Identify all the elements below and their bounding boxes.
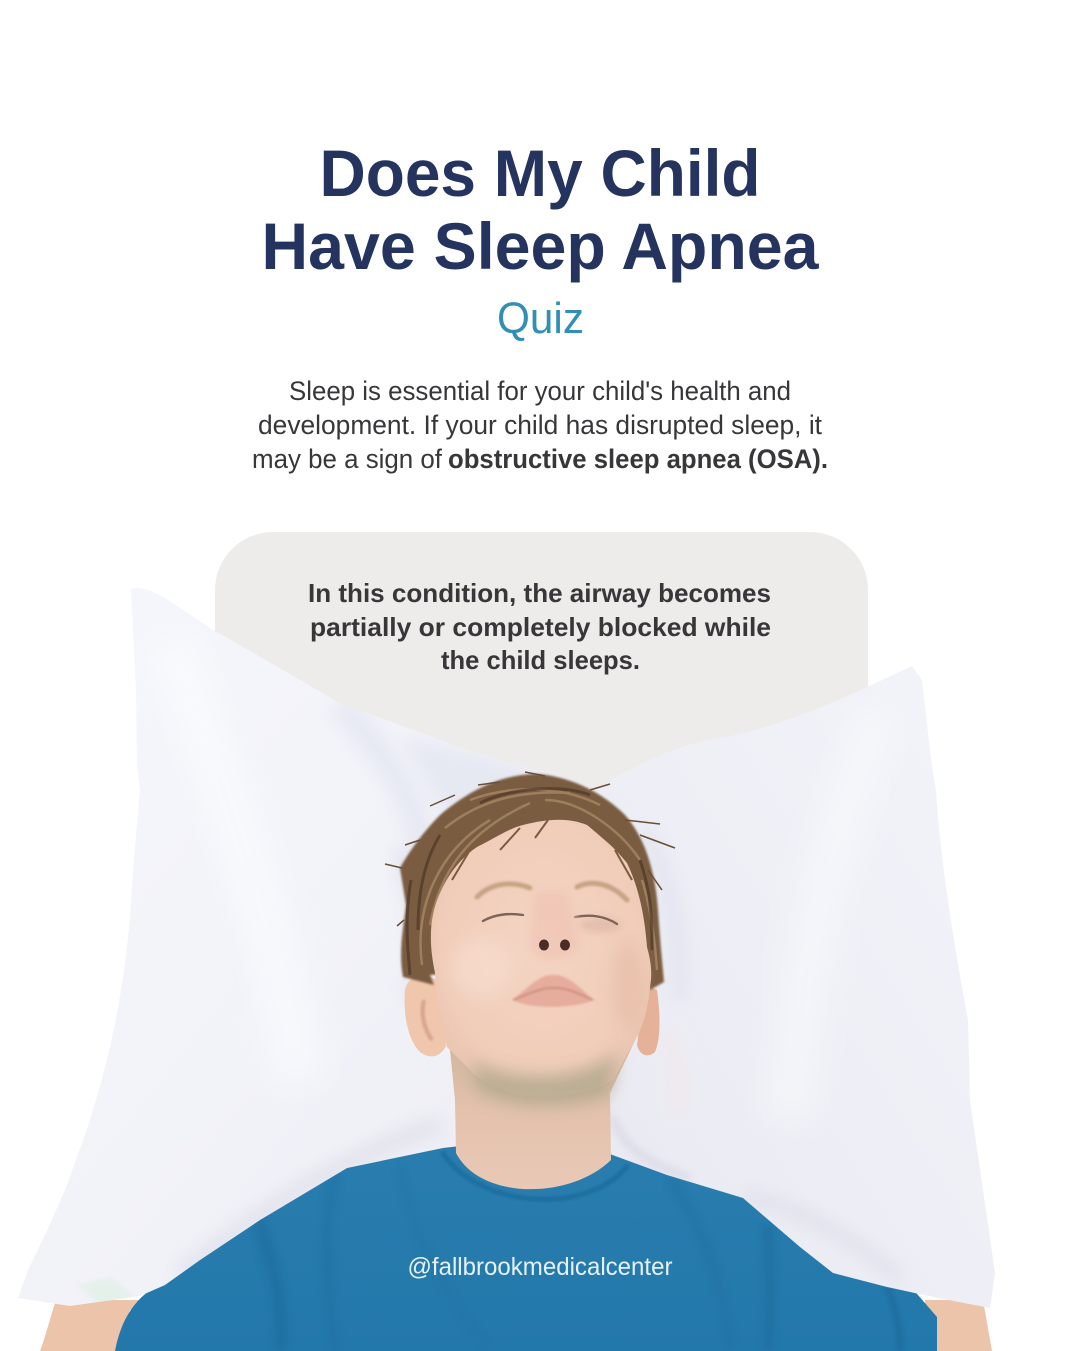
intro text: obstructive sleep apnea (OSA). — [448, 444, 828, 474]
closed eyes — [483, 914, 617, 924]
mouth — [513, 975, 593, 1007]
hair — [385, 772, 675, 990]
arms — [40, 1300, 992, 1351]
intro text: may be a sign of — [252, 444, 442, 474]
forehead hair strands — [452, 820, 632, 880]
handle: @fallbrookmedicalcenter — [408, 1253, 672, 1281]
callout text — [308, 578, 771, 675]
subtitle: Quiz: Quiz — [497, 294, 584, 343]
title — [262, 136, 820, 283]
photo: boy sleeping on pillow — [18, 588, 995, 1351]
intro text — [252, 376, 828, 474]
eyebrows — [477, 883, 627, 900]
left pillow — [18, 588, 590, 1306]
t-shirt — [115, 1146, 937, 1351]
ears — [405, 976, 659, 1056]
title: Have Sleep Apnea — [262, 209, 820, 283]
callout panel — [215, 532, 868, 800]
face shading — [452, 918, 644, 1106]
callout text: In this condition, the airway becomes — [308, 578, 771, 608]
intro text: development. If your child has disrupted sleep, it — [258, 410, 822, 440]
shirt collar — [442, 1152, 628, 1199]
callout text: the child sleeps. — [441, 645, 640, 675]
face — [431, 820, 651, 1097]
callout text: partially or completely blocked while — [310, 612, 771, 642]
title: Does My Child — [320, 136, 760, 210]
neck — [448, 1030, 640, 1189]
intro text: Sleep is essential for your child's health and — [289, 376, 791, 406]
right pillow — [590, 666, 995, 1308]
nose — [530, 890, 580, 960]
